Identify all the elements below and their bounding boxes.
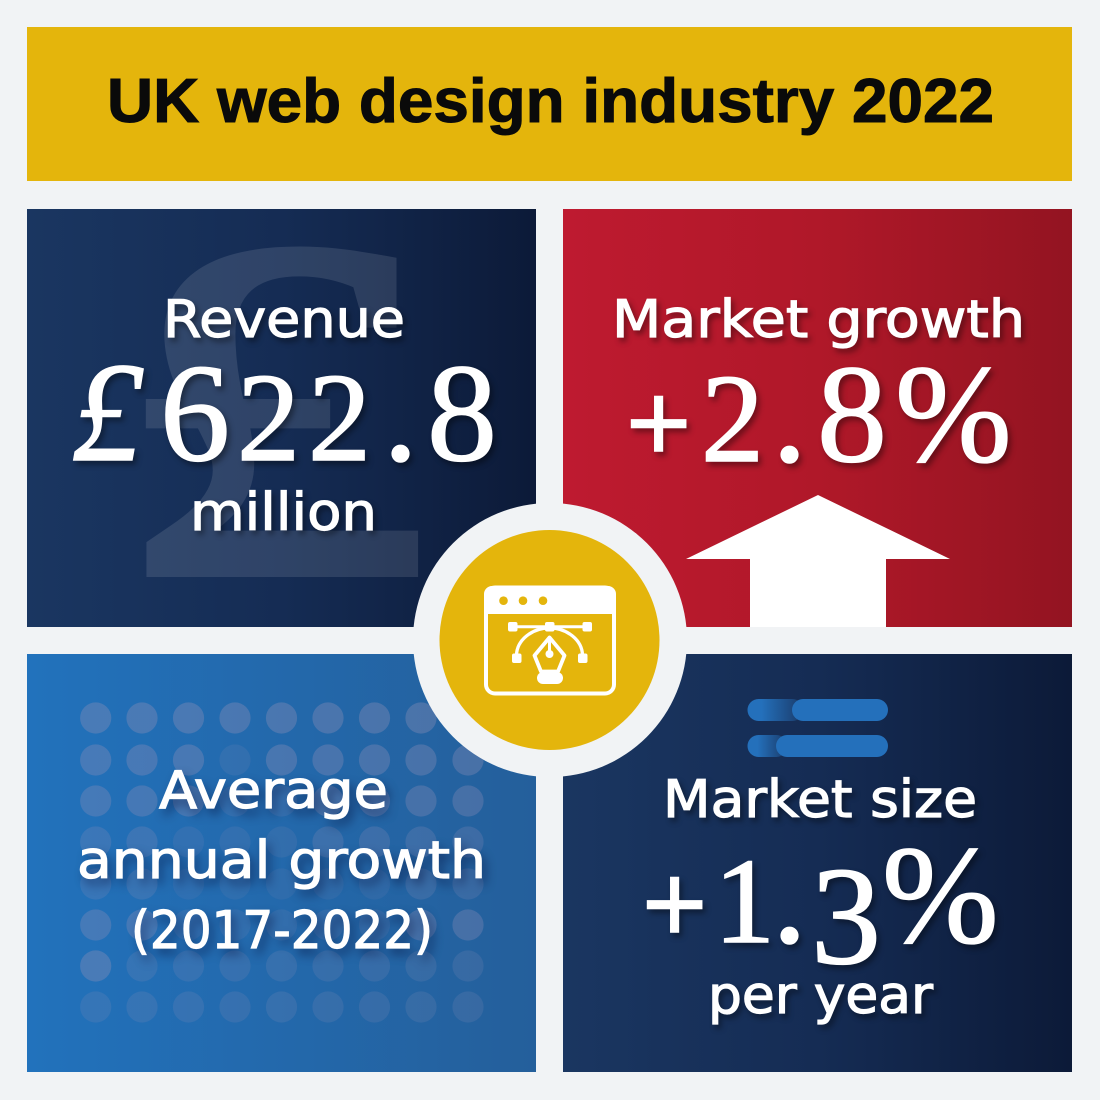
icon: pound watermark: £ — [115, 141, 431, 677]
revenue value: . — [383, 336, 418, 491]
market growth value: % — [895, 337, 1012, 492]
title banner — [27, 27, 1072, 181]
icon: up arrow — [686, 495, 950, 627]
panel: market size — [563, 654, 1072, 1072]
panel: market growth — [563, 209, 1072, 627]
average label: Average — [159, 761, 388, 821]
revenue value: 2 — [308, 349, 371, 488]
market growth value: 2 — [701, 350, 764, 489]
market growth label: Market growth — [612, 290, 1025, 350]
market growth value: + — [627, 362, 690, 486]
market size unit: per year — [708, 966, 934, 1026]
revenue value: 6 — [160, 336, 230, 491]
revenue label: Revenue — [163, 290, 405, 350]
market growth value: 8 — [817, 337, 887, 492]
panel: revenue — [27, 141, 536, 677]
revenue value: £ — [72, 333, 144, 491]
market size value: % — [882, 818, 999, 973]
dot pattern — [80, 702, 484, 1023]
revenue unit: million — [190, 483, 377, 543]
period label: (2017-2022) — [131, 901, 433, 961]
market size value: 1 — [714, 834, 775, 969]
icon: browser window with pen tool — [484, 586, 616, 694]
revenue value: 8 — [427, 336, 497, 491]
center badge — [413, 503, 687, 777]
market size label: Market size — [663, 770, 977, 830]
market growth value: . — [772, 337, 807, 492]
revenue value: 2 — [237, 349, 300, 488]
panel: average annual growth — [27, 654, 536, 1072]
title: UK web design industry 2022 — [107, 67, 994, 136]
market size value: 3 — [811, 839, 881, 994]
annual growth label: annual growth — [77, 831, 486, 891]
icon: bars — [748, 699, 888, 757]
market size value: . — [772, 818, 807, 973]
market size value: + — [643, 843, 706, 967]
